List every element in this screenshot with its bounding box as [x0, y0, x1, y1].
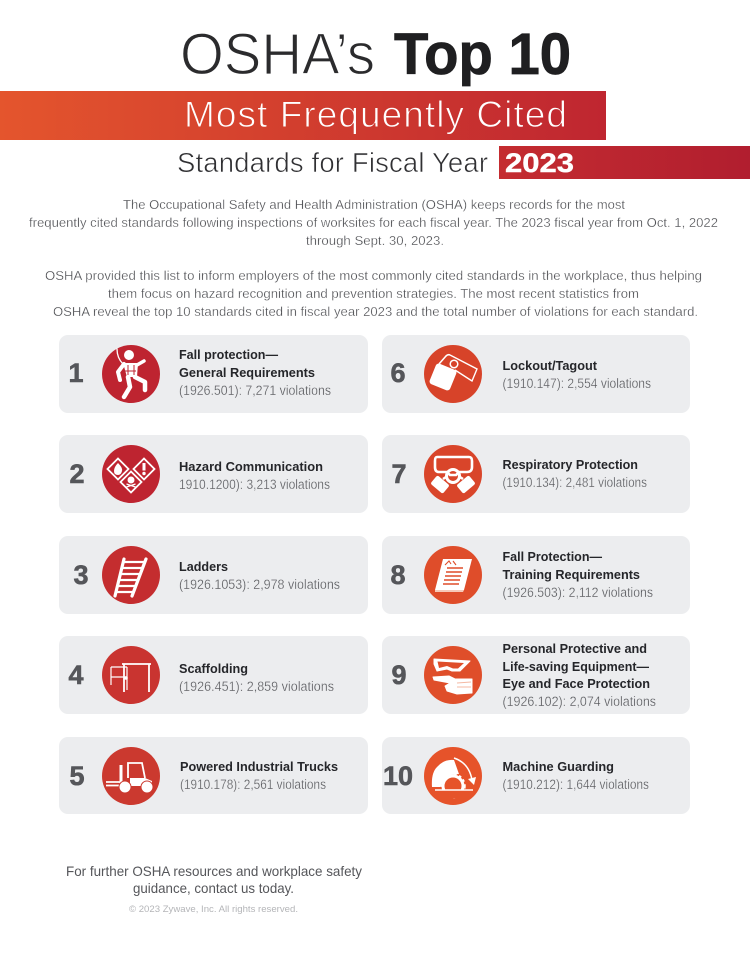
- number 5: 5: [69, 761, 85, 791]
- text: [502, 549, 653, 600]
- number 4: 4: [68, 660, 84, 690]
- footer call to action: guidance, contact us today.: [133, 880, 294, 896]
- intro paragraph 1: through Sept. 30, 2023.: [306, 233, 444, 248]
- intro paragraph 2: OSHA reveal the top 10 standards cited in fiscal year 2023 and the total number of violations for each standard.: [53, 304, 698, 319]
- icon: training document: [424, 546, 482, 604]
- panel: item 2 hazard communication: [59, 435, 368, 513]
- text: (1926.451): 2,859 violations: [179, 679, 334, 694]
- footer call to action: [66, 863, 362, 896]
- text: [502, 358, 651, 391]
- copyright: © 2023 Zywave, Inc. All rights reserved.: [129, 904, 298, 915]
- intro paragraph 1: [29, 197, 718, 248]
- title: Top 10: [394, 22, 571, 87]
- intro paragraph 2: [45, 268, 702, 319]
- intro paragraph 1: The Occupational Safety and Health Administration (OSHA) keeps records for the most: [123, 197, 625, 212]
- title: [180, 22, 571, 87]
- number 9: 9: [391, 660, 407, 690]
- title: OSHA’s: [180, 22, 375, 87]
- panel: item 7 respiratory protection: [382, 435, 690, 513]
- subtitle: standards for fiscal year: Standards for Fiscal Year: [177, 147, 488, 178]
- text: (1926.503): 2,112 violations: [502, 585, 653, 600]
- icon: worker in harness: [102, 345, 160, 403]
- text: Personal Protective and: [502, 641, 647, 656]
- icon: scaffolding: [102, 646, 160, 704]
- text: [179, 559, 340, 592]
- panel: item 5 powered industrial trucks: [59, 737, 368, 814]
- text: (1926.102): 2,074 violations: [502, 694, 656, 709]
- panel: item 3 ladders: [59, 536, 368, 614]
- text: [180, 759, 338, 792]
- panel: item 6 lockout tagout: [382, 335, 690, 413]
- panel: item 8 fall protection training: [382, 536, 690, 614]
- icon: saw guard: [424, 747, 482, 805]
- text: [179, 347, 331, 398]
- text: [179, 661, 334, 694]
- icon: forklift: [102, 747, 160, 805]
- text: [502, 641, 656, 709]
- text: (1926.501): 7,271 violations: [179, 383, 331, 398]
- panel: item 4 scaffolding: [59, 636, 368, 714]
- text: General Requirements: [179, 365, 315, 380]
- text: (1910.212): 1,644 violations: [502, 777, 649, 792]
- text: 1910.1200): 3,213 violations: [179, 477, 330, 492]
- banner: 2023: [499, 146, 750, 179]
- text: (1910.134): 2,481 violations: [502, 475, 647, 490]
- panel: item 9 personal protective equipment: [382, 636, 690, 714]
- text: Ladders: [179, 559, 228, 574]
- number 8: 8: [390, 560, 406, 590]
- icon: respirator mask: [424, 445, 482, 503]
- banner: most frequently cited: Most Frequently Cited: [184, 94, 567, 135]
- intro paragraph 2: them focus on hazard recognition and prevention strategies. The most recent statistics from: [108, 286, 639, 301]
- text: Lockout/Tagout: [502, 358, 598, 373]
- icon: goggles and hand: [424, 646, 482, 704]
- number 1: 1: [68, 358, 84, 388]
- icon: lock and tag: [424, 345, 482, 403]
- text: Fall Protection—: [502, 549, 602, 564]
- text: Powered Industrial Trucks: [180, 759, 338, 774]
- text: Scaffolding: [179, 661, 248, 676]
- text: Eye and Face Protection: [502, 676, 650, 691]
- text: [502, 759, 649, 792]
- number 2: 2: [69, 459, 85, 489]
- text: Respiratory Protection: [502, 457, 638, 472]
- icon: ladder: [102, 546, 160, 604]
- text: (1910.178): 2,561 violations: [180, 777, 326, 792]
- text: Machine Guarding: [502, 759, 614, 774]
- panel: item 10 machine guarding: [382, 737, 690, 814]
- text: [502, 457, 647, 490]
- text: (1910.147): 2,554 violations: [502, 376, 651, 391]
- panel: item 1 fall protection: [59, 335, 368, 413]
- footer call to action: For further OSHA resources and workplace safety: [66, 863, 362, 879]
- text: (1926.1053): 2,978 violations: [179, 577, 340, 592]
- banner: 2023: 2023: [505, 148, 574, 178]
- icon: hazard diamonds: [102, 445, 160, 503]
- intro paragraph 2: OSHA provided this list to inform employers of the most commonly cited standards in the workplace, thus helping: [45, 268, 702, 283]
- text: Fall protection—: [179, 347, 278, 362]
- number 3: 3: [73, 560, 89, 590]
- text: [179, 459, 330, 492]
- text: Hazard Communication: [179, 459, 323, 474]
- text: Training Requirements: [502, 567, 640, 582]
- number 7: 7: [391, 459, 407, 489]
- number 10: 10: [383, 761, 413, 791]
- intro paragraph 1: frequently cited standards following inspections of worksites for each fiscal year. The 2023 fiscal year from Oct. 1, 2022: [29, 215, 718, 230]
- number 6: 6: [390, 358, 406, 388]
- text: Life-saving Equipment—: [502, 659, 649, 674]
- banner: most frequently cited: [0, 91, 606, 140]
